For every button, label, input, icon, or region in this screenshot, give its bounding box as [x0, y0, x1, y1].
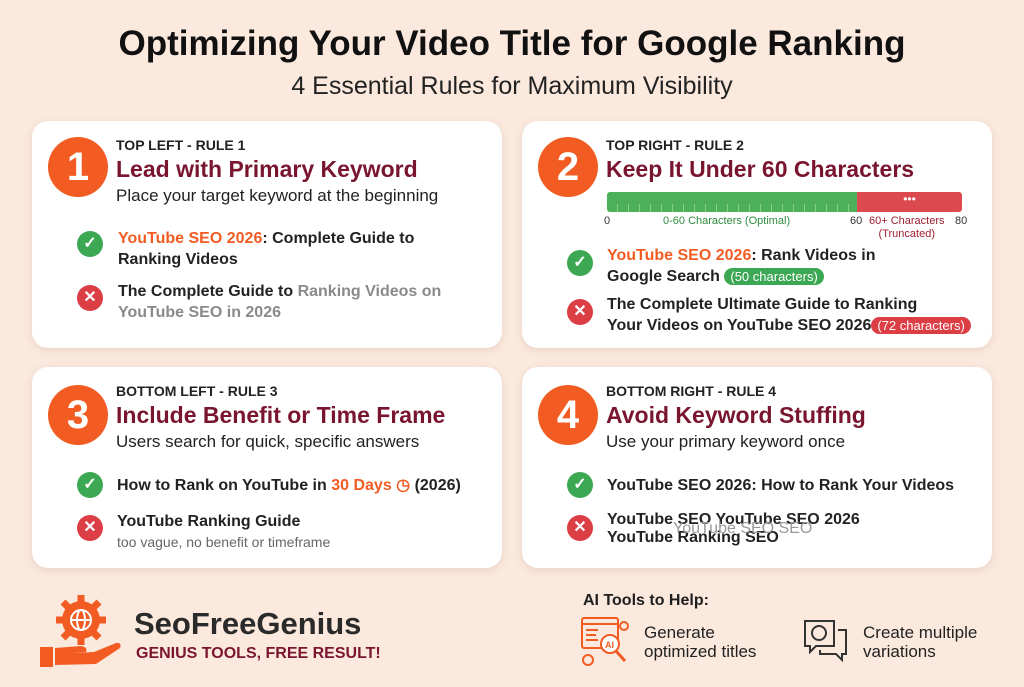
icon: cross: ✕ [573, 519, 587, 536]
bad example: too vague, no benefit or timeframe [117, 534, 330, 550]
icon: check [77, 231, 103, 257]
AI tools section [581, 592, 977, 666]
text: generate: optimized titles [644, 642, 756, 661]
icon: cross: ✕ [573, 303, 587, 320]
icon: check: ✓ [83, 476, 97, 493]
brand name: SeoFreeGenius [134, 606, 361, 641]
good example: Ranking Videos [118, 251, 238, 268]
label: TOP RIGHT - RULE 2 [606, 137, 744, 153]
good example: YouTube SEO 2026: How to Rank Your Videos [607, 477, 954, 494]
bad example [607, 511, 860, 546]
icon: cross [567, 299, 593, 325]
bad example [607, 296, 971, 334]
icon: hand with gear [40, 595, 120, 667]
description: Place your target keyword at the beginning [116, 186, 438, 205]
panel: rule 3 [32, 367, 502, 568]
icon: cross: ✕ [83, 289, 97, 306]
bar chart: character scale: (Truncated) [879, 228, 935, 240]
number 2: 2 [557, 145, 579, 189]
good example: (50 characters) [730, 269, 818, 284]
panel: rule 2 [522, 121, 992, 348]
heading: Keep It Under 60 Characters [606, 156, 914, 182]
subtitle: 4 Essential Rules for Maximum Visibility [291, 72, 733, 100]
icon: chat [804, 620, 847, 662]
icon: cross [567, 515, 593, 541]
text: variations: variations [863, 642, 936, 661]
bar chart: character scale [604, 192, 967, 240]
icon: check: ✓ [573, 254, 587, 271]
bad example: The Complete Ultimate Guide to Ranking [607, 296, 917, 313]
text: generate [644, 623, 756, 661]
bad example: The Complete Guide to Ranking Videos on [118, 283, 441, 300]
bar chart: character scale: 80 [955, 215, 967, 227]
bad example [118, 283, 441, 321]
good example: Google Search [607, 268, 720, 285]
icon: AI search: AI [605, 640, 614, 650]
bad example: YouTube Ranking SEO [607, 529, 779, 546]
icon: cross [77, 515, 103, 541]
bad example: YouTube SEO YouTube SEO 2026 [607, 511, 860, 528]
icon: AI search [581, 617, 629, 666]
bad example [117, 513, 330, 550]
good example: YouTube SEO 2026: Rank Videos in [607, 247, 876, 264]
text: variations [863, 623, 977, 661]
good example [607, 247, 876, 285]
good example: How to Rank on YouTube in 30 Days ◷ (2026) [117, 477, 461, 494]
bar chart: character scale: 0 [604, 215, 610, 227]
text: variations: Create multiple [863, 623, 977, 642]
good example: YouTube SEO 2026: Complete Guide to [118, 230, 414, 247]
icon: check [77, 472, 103, 498]
heading: Lead with Primary Keyword [116, 156, 418, 182]
icon: check [567, 472, 593, 498]
number 3 [48, 385, 108, 445]
bad example: YouTube SEO SEO [673, 520, 812, 537]
number 3: 3 [67, 393, 89, 437]
bad example: YouTube SEO in 2026 [118, 304, 281, 321]
bad example: YouTube Ranking Guide [117, 513, 300, 530]
label: BOTTOM RIGHT - RULE 4 [606, 383, 776, 399]
icon: cross: ✕ [83, 519, 97, 536]
label: BOTTOM LEFT - RULE 3 [116, 383, 278, 399]
icon: check [567, 250, 593, 276]
number 1: 1 [67, 145, 89, 189]
bar chart: character scale: ••• [903, 192, 916, 206]
bar chart: character scale: 0-60 Characters (Optimal) [663, 215, 790, 227]
bar chart: character scale: 60+ Characters [869, 215, 945, 227]
number 2 [538, 137, 598, 197]
number 4: 4 [557, 393, 579, 437]
icon: check: ✓ [83, 235, 97, 252]
title: Optimizing Your Video Title for Google Ranking [119, 24, 905, 63]
label: TOP LEFT - RULE 1 [116, 137, 245, 153]
heading: Avoid Keyword Stuffing [606, 402, 866, 428]
description: Use your primary keyword once [606, 432, 845, 451]
tagline: GENIUS TOOLS, FREE RESULT! [136, 645, 381, 662]
icon: cross [77, 285, 103, 311]
icon: check: ✓ [573, 476, 587, 493]
heading: AI Tools to Help: [583, 592, 709, 609]
number 4 [538, 385, 598, 445]
bar chart: character scale: 60 [850, 215, 862, 227]
good example [118, 230, 414, 268]
text: generate: Generate [644, 623, 715, 642]
heading: Include Benefit or Time Frame [116, 402, 445, 428]
logo: SeoFreeGenius [40, 595, 381, 667]
bad example: (72 characters) [877, 318, 965, 333]
panel: rule 4 [522, 367, 992, 568]
panel: rule 1 [32, 121, 502, 348]
description: Users search for quick, specific answers [116, 432, 419, 451]
number 1 [48, 137, 108, 197]
bad example: Your Videos on YouTube SEO 2026 [607, 317, 871, 334]
